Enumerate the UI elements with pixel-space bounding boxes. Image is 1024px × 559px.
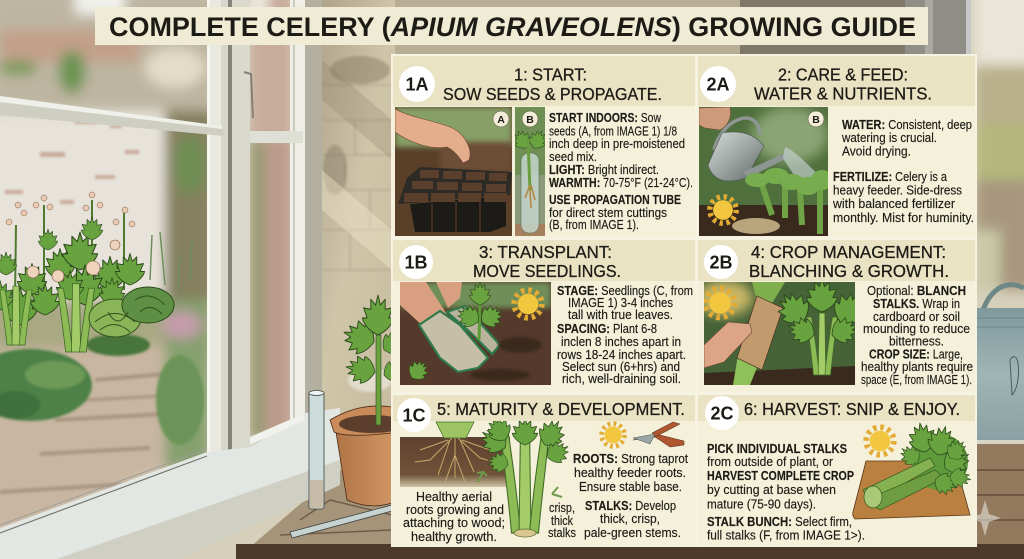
text block: care: watering is crucial.	[841, 131, 937, 145]
text block: crop management: Optional: BLANCH	[867, 284, 966, 298]
number badge 2A: 2A	[706, 74, 730, 94]
lettuce heads	[89, 299, 141, 337]
icon: sun	[602, 424, 624, 446]
panel: 2B crop management	[697, 240, 975, 392]
heading 4	[749, 242, 949, 281]
number badge 2B: 2B	[709, 252, 733, 272]
heading 4: BLANCHING & GROWTH.	[749, 261, 949, 281]
callout: crisp thick stalks: stalks	[548, 526, 576, 540]
text block: care	[832, 118, 974, 225]
text block: start: for direct stem cuttings	[549, 206, 667, 220]
callout: crisp thick stalks: thick	[551, 514, 574, 528]
title text: COMPLETE CELERY (APIUM GRAVEOLENS) GROWING GUIDE	[109, 12, 916, 42]
heading 3	[473, 242, 621, 281]
icon: fertilizer pile	[732, 218, 780, 234]
text: roots and stalks	[573, 452, 688, 540]
text block: care: FERTILIZE: Celery is a	[833, 170, 947, 184]
text block: start: START INDOORS: Sow	[549, 111, 662, 125]
heading 1	[443, 64, 662, 104]
image A: sowing into tray	[395, 107, 512, 236]
text: aerial roots: attaching to wood;	[403, 516, 505, 530]
text block: transplant: SPACING: Plant 6-8	[557, 322, 657, 336]
number badge 1C: 1C	[402, 406, 426, 426]
watering can, background right	[976, 285, 1024, 444]
text block: harvest: from outside of plant, or	[707, 455, 833, 469]
heading 5: 5: MATURITY & DEVELOPMENT.	[437, 399, 685, 419]
text: roots and stalks: STALKS: Develop	[585, 499, 676, 513]
heading 1: 1: START:	[514, 64, 587, 84]
text block: transplant: STAGE: Seedlings (C, from	[557, 284, 693, 298]
text block: start: inch deep in pre-moistened	[549, 137, 685, 151]
badge B	[522, 111, 538, 127]
text: aerial roots	[403, 490, 505, 544]
text: roots and stalks: healthy feeder roots.	[574, 466, 686, 480]
text: roots and stalks: pale-green stems.	[584, 526, 681, 540]
image: gloved hands planting	[400, 282, 551, 385]
text: roots and stalks: Ensure stable base.	[579, 480, 682, 494]
text block: care: with balanced fertilizer	[832, 197, 955, 211]
celery plants	[0, 286, 32, 345]
icon: window latch handle	[244, 72, 253, 118]
heading 2: WATER & NUTRIENTS.	[754, 84, 932, 104]
text block: transplant: Select sun (6+hrs) and	[562, 360, 680, 374]
soil cross-section with roots	[400, 422, 510, 487]
table top and dark plank	[236, 440, 1024, 559]
heading 4: 4: CROP MANAGEMENT:	[751, 242, 946, 262]
panel: 1C maturity	[393, 395, 695, 546]
text: aerial roots: Healthy aerial	[416, 490, 492, 504]
image B: propagation tube	[515, 107, 545, 236]
image: watering seedlings	[699, 107, 833, 236]
badge B: B	[812, 114, 820, 126]
text: aerial roots: healthy growth.	[411, 530, 497, 544]
guide panel backing	[391, 54, 977, 547]
flowering stems	[15, 200, 124, 310]
badge A	[493, 111, 509, 127]
image: blanching tube and celery	[704, 282, 855, 385]
text block: start: seeds (A, from IMAGE 1) 1/8	[549, 124, 677, 138]
number badge 1C	[397, 398, 431, 432]
illustrated garden plants on glass	[0, 192, 204, 445]
icon: sun	[710, 197, 736, 223]
panel: 2A care and feed	[698, 56, 975, 237]
text block: crop management: STALKS. Wrap in	[873, 297, 960, 311]
potted seedling	[330, 295, 411, 506]
text block: start: (B, from IMAGE 1).	[549, 218, 639, 232]
text block: start: seed mix.	[549, 150, 597, 164]
panel: 1A start	[393, 56, 695, 237]
text block: crop management: space (E, from IMAGE 1).	[861, 373, 972, 387]
text block: crop management: healthy plants require	[861, 360, 973, 374]
text block: transplant: rows 18-24 inches apart.	[557, 348, 686, 362]
icon: sun	[866, 427, 894, 455]
text block: crop management: CROP SIZE: Large,	[869, 348, 963, 362]
sparkle mark	[969, 500, 1001, 536]
text block: transplant: inclen 8 inches apart in	[561, 335, 681, 349]
text block: care: heavy feeder. Side-dress	[833, 184, 962, 198]
heading 6: 6: HARVEST: SNIP & ENJOY.	[744, 399, 960, 419]
number badge 2C: 2C	[710, 404, 734, 424]
badge B	[808, 111, 824, 127]
text: aerial roots: roots growing and	[406, 503, 504, 517]
text block: care: WATER: Consistent, deep	[842, 118, 972, 132]
dense leaf clusters	[0, 252, 17, 275]
text block: care: monthly. Mist for huminity.	[833, 211, 974, 225]
heading 3: 3: TRANSPLANT:	[479, 242, 612, 262]
text block: start: LIGHT: Bright indirect.	[549, 163, 659, 177]
text block: crop management: bitterness.	[889, 334, 944, 348]
text block: start	[549, 111, 693, 232]
number badge 2C	[705, 396, 739, 430]
number badge 1A	[399, 66, 435, 102]
text block: harvest: by cutting at base when	[707, 483, 836, 497]
icon: sun	[514, 290, 542, 318]
panel: 1B transplant	[393, 240, 695, 392]
icon: pruners	[633, 422, 684, 447]
window sill	[0, 408, 340, 559]
icon: sun	[706, 289, 734, 317]
text block: transplant: rich, well-draining soil.	[562, 372, 681, 386]
badge B: B	[526, 114, 534, 126]
text block: harvest	[707, 442, 865, 542]
text block: harvest: full stalks (F, from IMAGE 1>).	[707, 528, 865, 542]
callout: crisp thick stalks	[548, 501, 576, 540]
title banner	[95, 7, 928, 45]
heading 3: MOVE SEEDLINGS.	[473, 261, 621, 281]
text block: harvest: mature (75-90 days).	[707, 498, 816, 512]
text block: transplant: IMAGE 1) 3-4 inches	[568, 296, 673, 310]
celery plant with base	[481, 421, 569, 538]
text block: start: WARMTH: 70-75°F (21-24°C).	[549, 176, 693, 190]
number badge 1B	[399, 245, 433, 279]
text block: start: USE PROPAGATION TUBE	[549, 193, 681, 207]
callout: crisp thick stalks: crisp,	[549, 501, 575, 515]
badge A: A	[497, 114, 505, 126]
text block: harvest: PICK INDIVIDUAL STALKS	[707, 442, 847, 456]
number badge 1B: 1B	[404, 252, 428, 272]
heading 2	[754, 64, 932, 104]
text block: crop management: mounding to reduce	[863, 322, 970, 336]
illustration: celery on cutting board	[853, 421, 975, 519]
text block: harvest: HARVEST COMPLETE CROP	[707, 469, 854, 483]
text block: transplant	[557, 284, 693, 386]
text block: crop management: cardboard or soil	[873, 310, 960, 324]
panel: 2C harvest	[698, 395, 975, 546]
text block: care: Avoid drying.	[842, 144, 911, 158]
propagation tube on sill	[290, 390, 392, 538]
low shrubs behind	[0, 334, 204, 445]
text: roots and stalks: thick, crisp,	[600, 512, 660, 526]
text block: transplant: tall with true leaves.	[568, 308, 673, 322]
text block: harvest: STALK BUNCH: Select firm,	[707, 515, 852, 529]
heading 2: 2: CARE & FEED:	[778, 64, 908, 84]
number badge 2A	[700, 66, 736, 102]
number badge 2B	[704, 245, 738, 279]
number badge 1A: 1A	[405, 74, 429, 94]
heading 1: SOW SEEDS & PROPAGATE.	[443, 84, 662, 104]
text: roots and stalks: ROOTS: Strong taprot	[573, 452, 688, 466]
text block: crop management	[861, 284, 973, 387]
brick hints and path slabs	[0, 120, 170, 494]
